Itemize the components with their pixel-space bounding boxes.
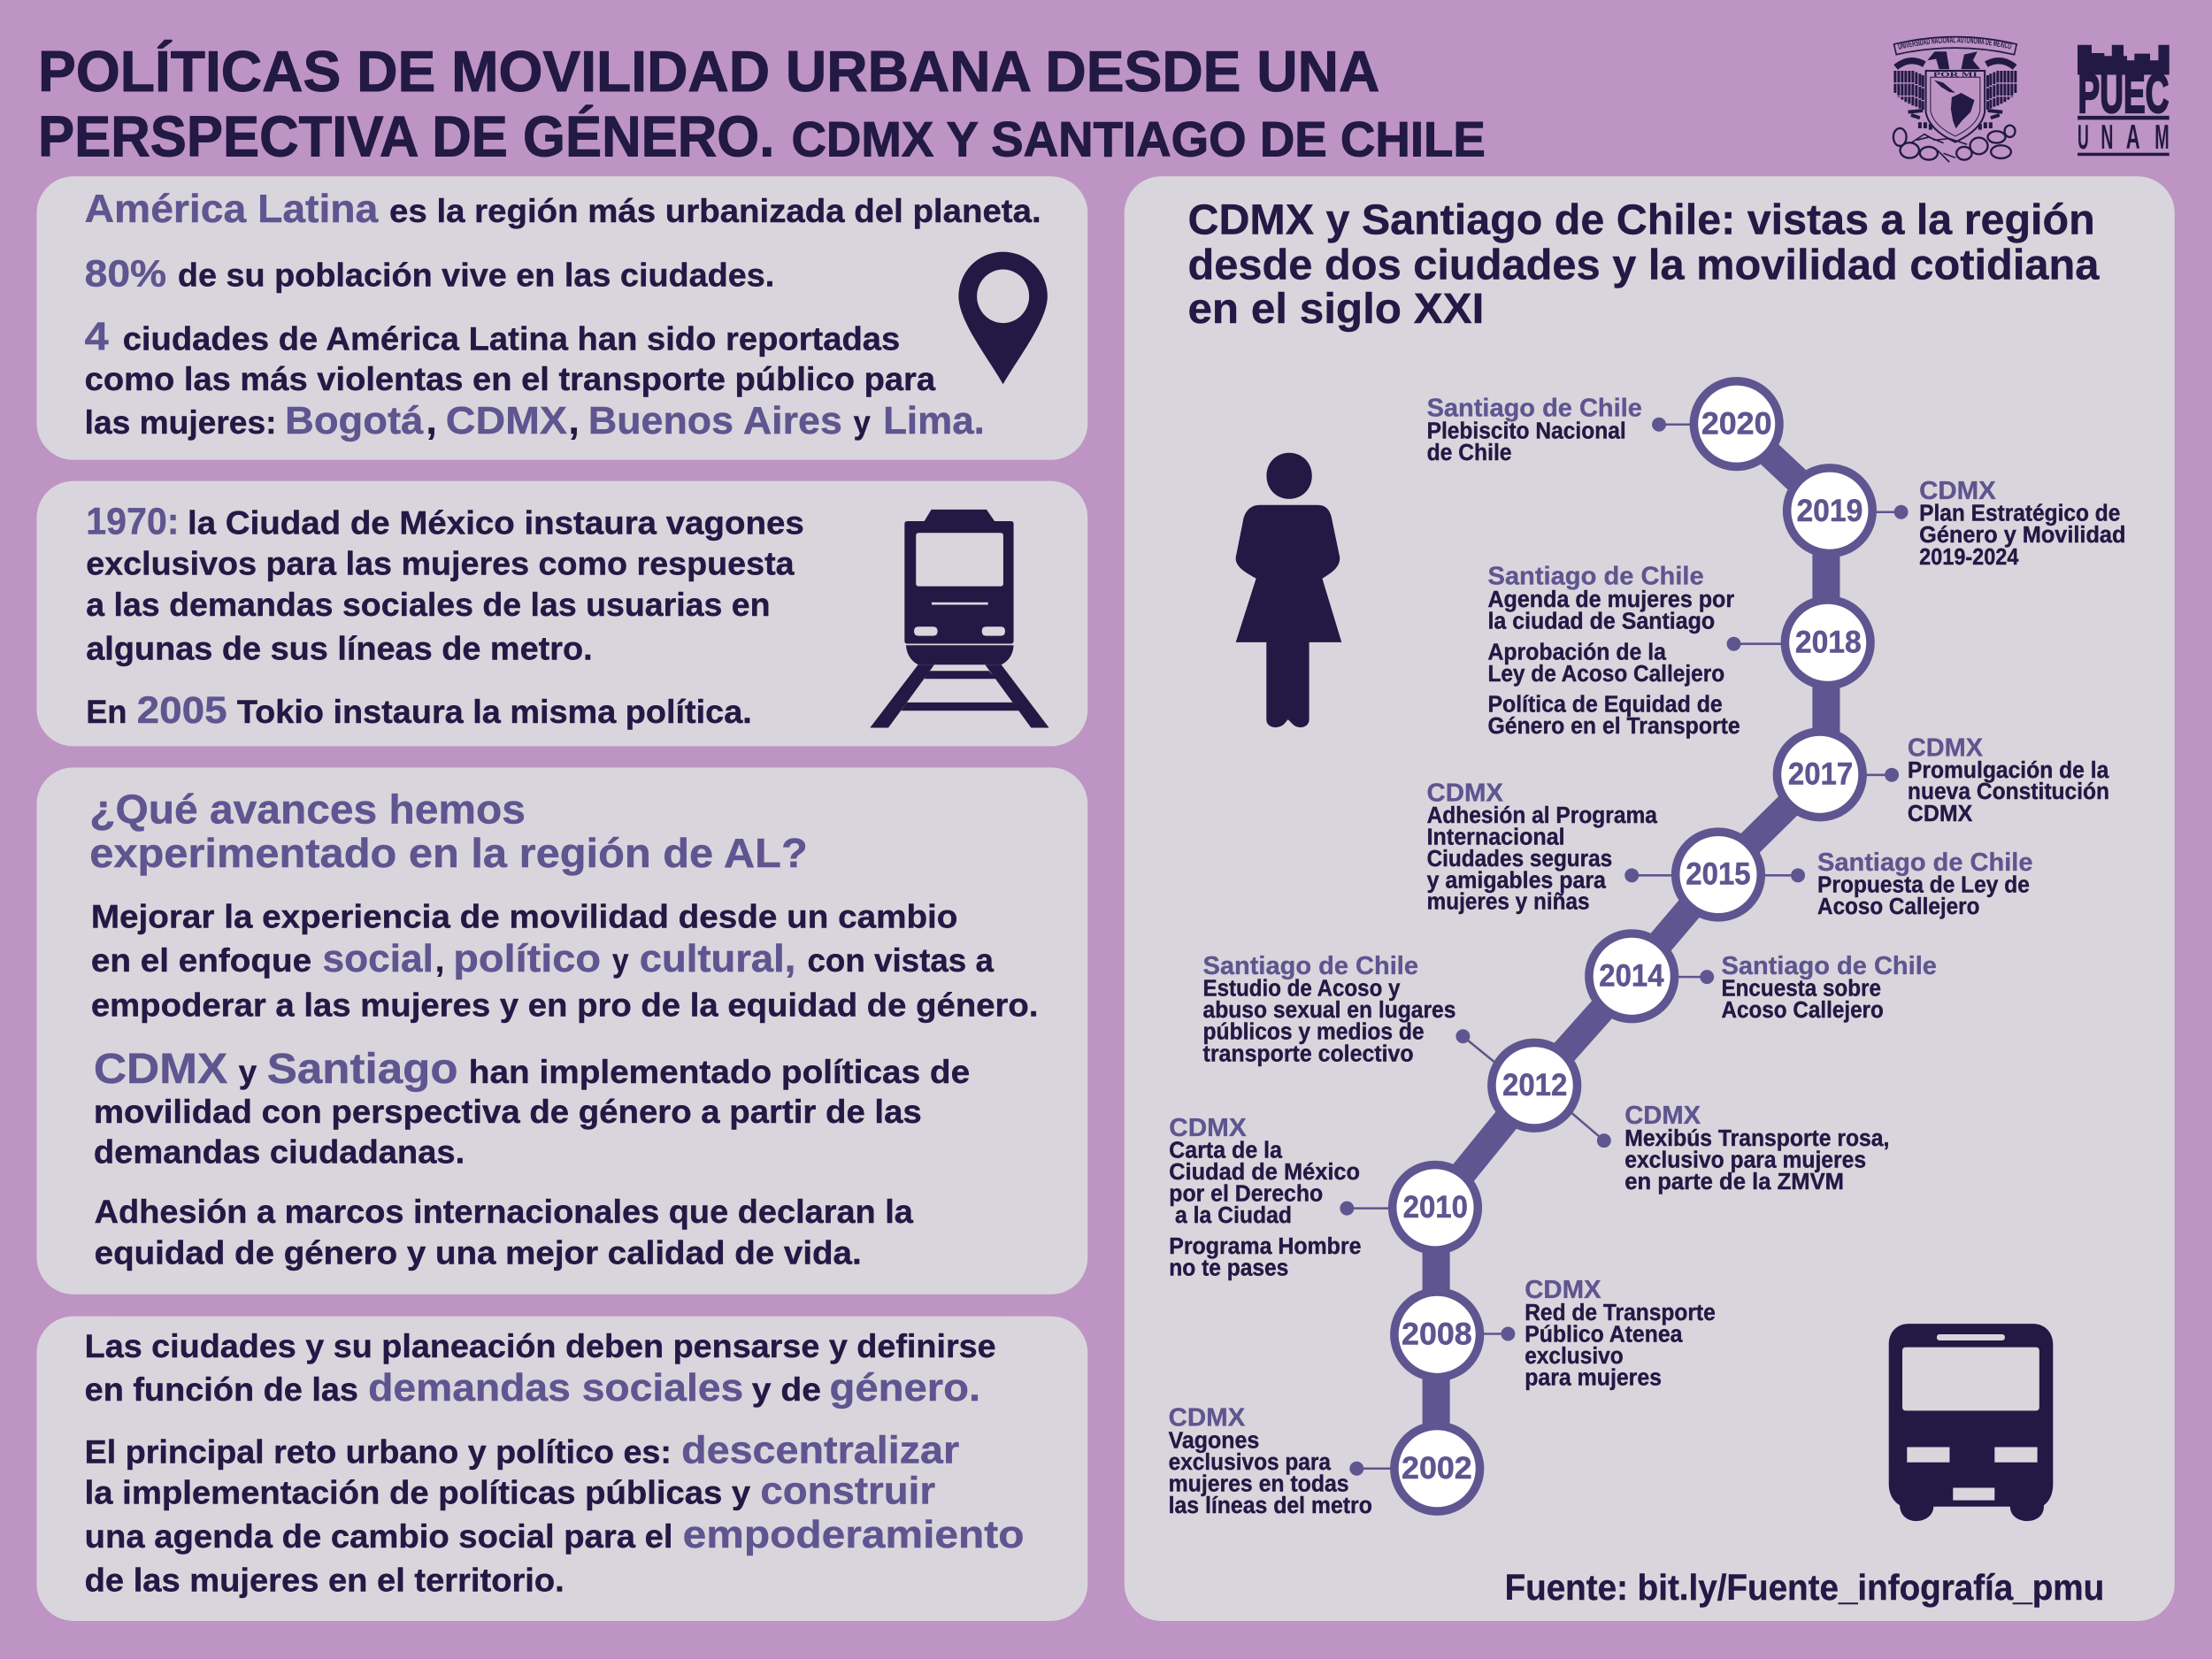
text block: 1970 y 2005: algunas de sus líneas de metro. <box>86 629 593 666</box>
event 2017: Promulgación de la <box>1908 757 2109 783</box>
event 2014 <box>1721 952 1937 1023</box>
event 2010: por el Derecho <box>1169 1179 1323 1206</box>
panel: vagones exclusivos <box>36 481 1087 746</box>
event 2010: Carta de la <box>1169 1136 1282 1163</box>
event 2019 <box>1919 477 2125 570</box>
timeline year nodes: 2002 <box>1402 1451 1472 1486</box>
text block: urbanización y violencia: las mujeres: <box>85 403 277 441</box>
heading: qué avances <box>89 786 808 876</box>
event 2015 CDMX: CDMX <box>1427 779 1503 807</box>
text block: urbanización y violencia: como las más violentas en el transporte público para <box>85 360 936 397</box>
text block: reto urbano: El principal reto urbano y político es: <box>85 1432 672 1470</box>
timeline line <box>1435 423 1830 1469</box>
title: POLÍTICAS DE MOVILIDAD URBANA DESDE UNA <box>38 39 1379 104</box>
text block: urbanización y violencia: América Latina <box>85 188 380 231</box>
event 2015 Santiago: Acoso Callejero <box>1817 893 1979 919</box>
logo: PUEC UNAM: M <box>2154 119 2170 157</box>
event 2008: para mujeres <box>1525 1364 1662 1391</box>
event 2015 CDMX: Ciudades seguras <box>1427 845 1612 872</box>
event 2008: Público Atenea <box>1525 1321 1683 1348</box>
text block: demandas sociales: género. <box>830 1366 980 1409</box>
text block: urbanización y violencia: es la región más urbanizada del planeta. <box>389 192 1041 229</box>
timeline connectors <box>1340 418 1909 1476</box>
event 2018: Política de Equidad de <box>1487 691 1723 718</box>
logo: PUEC UNAM <box>2078 45 2170 157</box>
text block: CDMX y Santiago: y <box>239 1053 257 1090</box>
logo: PUEC UNAM: U <box>2078 119 2089 157</box>
event 2019: Plan Estratégico de <box>1919 499 2120 526</box>
text block: 1970 y 2005: 1970: <box>86 500 179 542</box>
event 2015 Santiago: Propuesta de Ley de <box>1817 871 2030 897</box>
text block: experiencia de movilidad: político <box>453 937 601 980</box>
timeline year nodes: 2018 <box>1795 625 1862 659</box>
text block: 1970 y 2005: En <box>86 693 127 730</box>
text block: urbanización y violencia: , <box>426 399 437 442</box>
event 2015 CDMX: y amigables para <box>1427 866 1606 893</box>
heading: qué avances: experimentado en la región de AL? <box>89 830 808 876</box>
text block: demandas sociales: y de <box>752 1371 821 1408</box>
event 2012 Santiago: públicos y medios de <box>1203 1018 1425 1045</box>
icon: woman <box>1236 453 1341 727</box>
event 2008 <box>1525 1276 1716 1391</box>
event 2015 CDMX: mujeres y niñas <box>1427 888 1590 915</box>
event 2020: de Chile <box>1427 439 1512 465</box>
timeline year nodes <box>1393 381 1872 1511</box>
icon: metro train <box>870 510 1049 728</box>
event 2015 Santiago: Santiago de Chile <box>1817 849 2033 877</box>
event 2017 <box>1908 733 2109 826</box>
timeline year nodes: 2008 <box>1402 1317 1472 1351</box>
event 2018: Santiago de Chile <box>1487 563 1704 591</box>
event 2002: exclusivos para <box>1169 1448 1331 1475</box>
text block: urbanización y violencia: Buenos Aires <box>588 399 842 442</box>
logo: PUEC UNAM: A <box>2126 119 2140 157</box>
event 2010: no te pases <box>1169 1255 1288 1281</box>
text block: CDMX y Santiago <box>94 1046 970 1171</box>
event 2018: la ciudad de Santiago <box>1487 607 1715 634</box>
text block: demandas sociales <box>85 1327 996 1409</box>
text block: 1970 y 2005 <box>86 500 804 732</box>
event 2012 CDMX: Mexibús Transporte rosa, <box>1624 1125 1889 1151</box>
event 2017: CDMX <box>1908 800 1973 826</box>
event 2008: CDMX <box>1525 1276 1601 1304</box>
text block: experiencia de movilidad <box>91 898 1038 1024</box>
timeline year nodes: 2017 <box>1788 757 1853 791</box>
text block: CDMX y Santiago: CDMX <box>94 1046 227 1093</box>
logo: UNAM crest: POR MI <box>1933 70 1978 78</box>
heading: vistas a la región <box>1187 196 2100 333</box>
text block: demandas sociales: Las ciudades y su planeación deben pensarse y definirse <box>85 1327 996 1364</box>
heading: qué avances: ¿Qué avances hemos <box>89 786 526 832</box>
timeline year nodes: 2015 <box>1686 857 1751 892</box>
event 2012 CDMX: exclusivo para mujeres <box>1624 1147 1866 1173</box>
text block: experiencia de movilidad: Mejorar la experiencia de movilidad desde un cambio <box>91 898 957 935</box>
event 2014: Acoso Callejero <box>1721 996 1884 1023</box>
text block: urbanización y violencia <box>85 188 1041 442</box>
title: PERSPECTIVA DE GÉNERO. <box>38 104 774 168</box>
event 2002: CDMX <box>1169 1403 1245 1432</box>
event 2014: Santiago de Chile <box>1721 952 1937 980</box>
text block: 1970 y 2005: a las demandas sociales de las usuarias en <box>86 586 771 623</box>
timeline year nodes: 2014 <box>1599 958 1664 993</box>
text block: CDMX y Santiago: han implementado políticas de <box>469 1053 970 1090</box>
panel: línea de tiempo CDMX y Santiago <box>1125 176 2175 1621</box>
text block: urbanización y violencia: ciudades de América Latina han sido reportadas <box>123 319 900 357</box>
event 2017: nueva Constitución <box>1908 778 2109 804</box>
text block: urbanización y violencia: CDMX <box>446 399 567 442</box>
text block: urbanización y violencia: de su población vive en las ciudades. <box>178 257 774 294</box>
logo: UNAM crest: UNIVERSIDAD NACIONAL AUTONOMA DE MEXICO <box>1897 37 2012 50</box>
heading: vistas a la región: CDMX y Santiago de Chile: vistas a la región <box>1187 196 2095 244</box>
text block: marcos internacionales: equidad de género y una mejor calidad de vida. <box>95 1233 862 1271</box>
text block: experiencia de movilidad: , <box>435 941 444 979</box>
event 2012 CDMX: CDMX <box>1624 1102 1701 1130</box>
source note: Fuente: bit.ly/Fuente_infografía_pmu <box>1505 1567 2104 1608</box>
event 2002 <box>1169 1403 1372 1518</box>
event 2018: Agenda de mujeres por <box>1487 586 1734 612</box>
event 2012 Santiago: transporte colectivo <box>1203 1040 1414 1066</box>
event 2008: Red de Transporte <box>1525 1299 1716 1325</box>
text block: demandas sociales: demandas sociales <box>368 1366 743 1409</box>
event 2012 Santiago: abuso sexual en lugares <box>1203 996 1455 1023</box>
timeline year nodes: 2019 <box>1796 494 1863 528</box>
text block: reto urbano: una agenda de cambio social para el <box>85 1517 673 1555</box>
event 2018: Género en el Transporte <box>1487 712 1740 739</box>
event 2012 Santiago: Estudio de Acoso y <box>1203 975 1401 1002</box>
timeline year nodes: 2010 <box>1403 1190 1468 1225</box>
event 2018 <box>1487 563 1740 739</box>
text block: urbanización y violencia: Lima. <box>883 399 985 442</box>
text block: CDMX y Santiago: Santiago <box>267 1046 458 1093</box>
text block: 1970 y 2005: exclusivos para las mujeres como respuesta <box>86 545 795 582</box>
logo: UNAM crest <box>1892 35 2017 163</box>
event 2019: Género y Movilidad <box>1919 521 2125 548</box>
text block: experiencia de movilidad: con vistas a <box>807 941 995 979</box>
text block: marcos internacionales: Adhesión a marcos internacionales que declaran la <box>95 1193 914 1230</box>
event 2008: exclusivo <box>1525 1342 1624 1369</box>
event 2019: 2019-2024 <box>1919 543 2019 570</box>
panel: planeación y reto urbano <box>36 1317 1087 1621</box>
event 2002: mujeres en todas <box>1169 1470 1349 1496</box>
event 2002: Vagones <box>1169 1426 1259 1453</box>
text block: urbanización y violencia: Bogotá <box>285 399 424 442</box>
text block: experiencia de movilidad: y <box>612 941 629 979</box>
heading: vistas a la región: en el siglo XXI <box>1187 285 1484 333</box>
heading: vistas a la región: desde dos ciudades y la movilidad cotidiana <box>1187 242 2100 289</box>
event 2010: Ciudad de México <box>1169 1158 1360 1185</box>
event 2010: Programa Hombre <box>1169 1233 1361 1259</box>
text block: urbanización y violencia: 80% <box>85 253 166 296</box>
icon: map pin <box>958 252 1048 384</box>
text block: urbanización y violencia: 4 <box>85 315 109 358</box>
panel: América Latina <box>36 176 1087 460</box>
icon: bus <box>1889 1324 2053 1521</box>
event 2015 CDMX: Internacional <box>1427 824 1565 850</box>
event 2010: a la Ciudad <box>1175 1202 1292 1228</box>
panel: avances en la región <box>36 767 1087 1294</box>
event 2015 CDMX <box>1427 779 1657 915</box>
event 2018: Aprobación de la <box>1487 638 1666 664</box>
event 2002: las líneas del metro <box>1169 1492 1372 1518</box>
event 2010 <box>1169 1114 1361 1281</box>
text block: CDMX y Santiago: demandas ciudadanas. <box>94 1133 465 1171</box>
text block: urbanización y violencia: , <box>569 399 580 442</box>
text block: marcos internacionales <box>95 1193 914 1271</box>
text block: 1970 y 2005: la Ciudad de México instaura vagones <box>188 503 804 541</box>
text block: reto urbano: de las mujeres en el territorio. <box>85 1561 565 1598</box>
timeline year nodes: 2012 <box>1502 1068 1567 1102</box>
title: CDMX Y SANTIAGO DE CHILE <box>791 111 1486 166</box>
text block: reto urbano: construir <box>760 1470 935 1513</box>
event 2018: Ley de Acoso Callejero <box>1487 660 1724 687</box>
event 2012 CDMX <box>1624 1102 1889 1194</box>
text block: 1970 y 2005: Tokio instaura la misma política. <box>237 693 752 730</box>
text block: reto urbano: descentralizar <box>681 1428 959 1471</box>
event 2012 CDMX: en parte de la ZMVM <box>1624 1168 1844 1194</box>
text block: experiencia de movilidad: social <box>322 937 434 980</box>
text block: 1970 y 2005: 2005 <box>137 689 227 732</box>
event 2020: Plebiscito Nacional <box>1427 418 1626 444</box>
event 2012 Santiago <box>1203 952 1455 1066</box>
timeline year nodes: 2020 <box>1701 406 1772 441</box>
event 2020 <box>1427 394 1642 465</box>
event 2014: Encuesta sobre <box>1721 975 1881 1002</box>
text block: reto urbano: la implementación de políticas públicas y <box>85 1474 750 1511</box>
event 2019: CDMX <box>1919 477 1996 505</box>
logo: PUEC UNAM: N <box>2101 119 2113 157</box>
text block: reto urbano <box>85 1428 1025 1598</box>
text block: experiencia de movilidad: empoderar a las mujeres y en pro de la equidad de género. <box>91 987 1038 1024</box>
event 2020: Santiago de Chile <box>1427 394 1642 422</box>
text block: reto urbano: empoderamiento <box>683 1513 1025 1556</box>
title <box>38 39 1486 168</box>
event 2012 Santiago: Santiago de Chile <box>1203 952 1418 980</box>
event 2017: CDMX <box>1908 733 1983 762</box>
text block: experiencia de movilidad: en el enfoque <box>91 941 311 979</box>
text block: CDMX y Santiago: movilidad con perspectiva de género a partir de las <box>94 1093 922 1130</box>
event 2015 CDMX: Adhesión al Programa <box>1427 802 1657 828</box>
text block: experiencia de movilidad: cultural, <box>640 937 795 980</box>
text block: demandas sociales: en función de las <box>85 1371 358 1408</box>
text block: urbanización y violencia: y <box>854 403 871 441</box>
event 2015 Santiago <box>1817 849 2033 919</box>
event 2010: CDMX <box>1169 1114 1247 1142</box>
